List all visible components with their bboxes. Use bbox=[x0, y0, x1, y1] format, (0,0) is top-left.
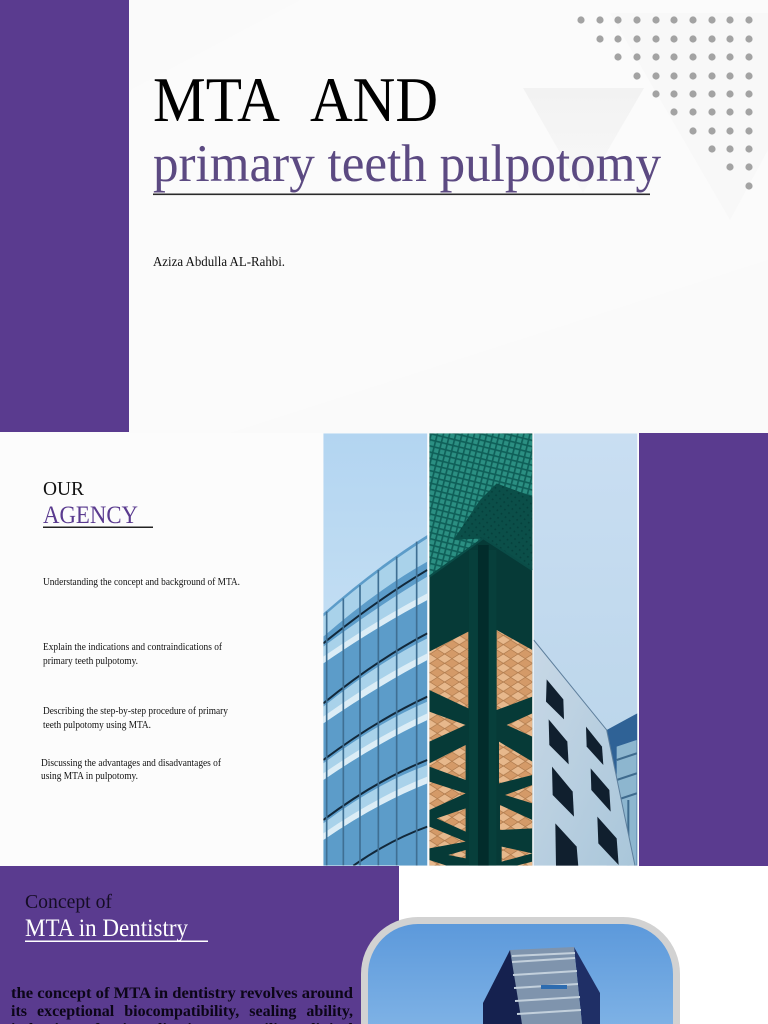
body paragraph: the concept of MTA in dentistry revolves around bbox=[11, 985, 353, 1002]
agenda item 3: teeth pulpotomy using MTA. bbox=[43, 719, 151, 731]
slide 2 background bbox=[0, 433, 768, 866]
panel: white building against sky bbox=[534, 433, 637, 867]
body paragraph: its exceptional biocompatibility, sealing ability, bbox=[11, 1003, 353, 1020]
agenda item 2 bbox=[43, 641, 222, 667]
heading: OUR AGENCY: OUR bbox=[43, 478, 85, 500]
agenda item 2: primary teeth pulpotomy. bbox=[43, 655, 138, 667]
purple right band bbox=[639, 433, 768, 866]
agenda item 4: Discussing the advantages and disadvantages of bbox=[41, 757, 221, 769]
agenda item 1: Understanding the concept and background of MTA. bbox=[43, 576, 240, 588]
rounded photo frame bbox=[361, 917, 680, 1024]
title underline bbox=[153, 194, 650, 195]
agenda item 2: Explain the indications and contraindications of bbox=[43, 641, 222, 653]
photo strip: three building panels bbox=[323, 433, 637, 867]
agenda item 3: Describing the step-by-step procedure of primary bbox=[43, 705, 228, 717]
agenda item 4 bbox=[41, 757, 221, 782]
panel: green tower with orange lattice bbox=[429, 433, 532, 866]
author name: Aziza Abdulla AL-Rahbi. bbox=[153, 255, 285, 270]
panel: curved glass building bbox=[323, 433, 427, 866]
subtitle: primary teeth pulpotomy: primary teeth pulpotomy bbox=[153, 135, 661, 193]
title: MTA AND: AND bbox=[310, 64, 438, 135]
slide 1 background bbox=[0, 0, 768, 433]
photo: tower against blue sky bbox=[368, 924, 673, 1024]
agenda item 4: using MTA in pulpotomy. bbox=[41, 770, 138, 782]
agenda item 3 bbox=[43, 705, 228, 731]
heading: OUR AGENCY bbox=[43, 478, 153, 529]
body paragraph bbox=[11, 985, 354, 1024]
slide 3 purple panel bbox=[0, 866, 399, 1024]
dot grid decoration bbox=[577, 16, 753, 190]
title: MTA AND: MTA bbox=[153, 64, 280, 135]
heading: Concept of MTA in Dentistry: MTA in Dentistry bbox=[25, 915, 188, 942]
heading: Concept of MTA in Dentistry: Concept of bbox=[25, 891, 112, 913]
purple side band bbox=[0, 0, 129, 432]
heading: OUR AGENCY: AGENCY bbox=[43, 502, 138, 529]
heading: Concept of MTA in Dentistry bbox=[25, 891, 208, 942]
title: MTA AND bbox=[153, 64, 438, 135]
